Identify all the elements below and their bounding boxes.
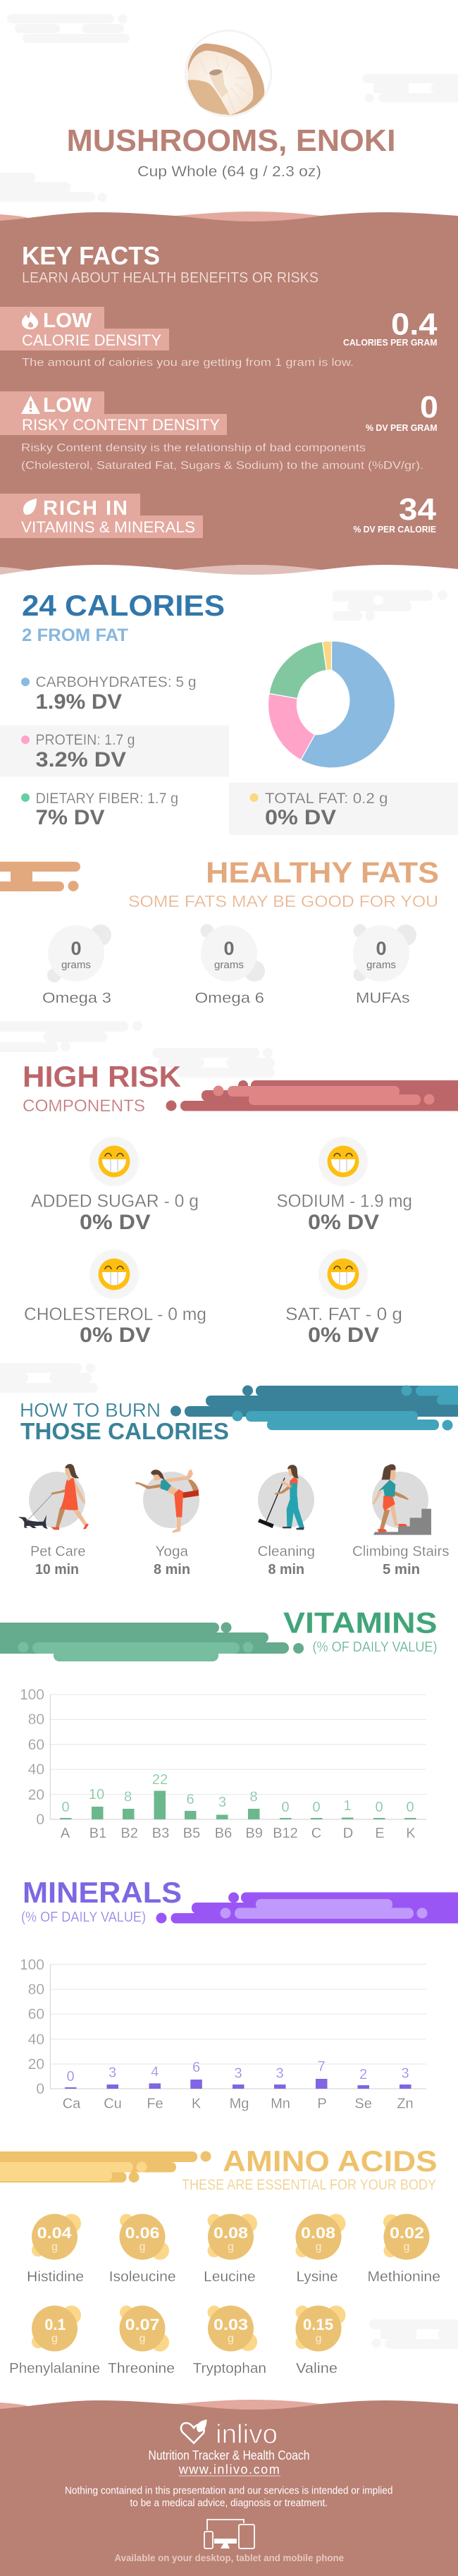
amino: phenylalanine: g [51, 2333, 58, 2345]
bar chart: vitamins: 10 [89, 1787, 104, 1802]
heading: how to burn: HOW TO BURN [20, 1399, 161, 1421]
bar chart: minerals: Fe [147, 2096, 163, 2111]
banner blob: teal [171, 1385, 458, 1430]
logo: inlivo: inlivo [216, 2420, 278, 2450]
amino: methionine: Methionine [367, 2269, 440, 2285]
bar chart: minerals: 6 [192, 2060, 200, 2075]
activity: climbing stairs: 5 min [383, 1562, 420, 1577]
banner blob: yellow [0, 2151, 211, 2183]
callout: calorie density [0, 307, 438, 369]
figure: woman sweeping [258, 1465, 304, 1530]
figure: woman in yoga pose [135, 1470, 199, 1533]
disclaimer: Nothing contained in this presentation and our services is intended or implied [65, 2485, 393, 2496]
amino: valine: Valine [296, 2361, 338, 2376]
bar chart: minerals: 3 [401, 2066, 409, 2082]
bar chart: vitamins: 100 [20, 1687, 44, 1703]
amino: phenylalanine: 0.1 [44, 2316, 66, 2333]
bar chart: minerals: 40 [28, 2032, 44, 2048]
bar chart: minerals [20, 1957, 426, 2111]
amino: isoleucine: g [140, 2241, 145, 2253]
item: added sugar: 0% DV [80, 1211, 151, 1234]
bar chart: minerals: 7 [317, 2059, 326, 2075]
fat: omega 6: Omega 6 [194, 990, 264, 1006]
heading: those calories: THOSE CALORIES [20, 1418, 229, 1444]
callout: risky content density [0, 390, 438, 472]
item: sodium: 0% DV [308, 1211, 379, 1234]
item: saturated fat: SAT. FAT - 0 g [285, 1305, 402, 1324]
heading: minerals: MINERALS [23, 1876, 182, 1909]
title: MUSHROOMS, ENOKI [66, 123, 396, 158]
bar chart: minerals: 4 [151, 2065, 159, 2080]
bar chart: vitamins: D [343, 1826, 353, 1841]
amino: isoleucine: 0.06 [125, 2224, 159, 2242]
callout: calorie density: CALORIES PER GRAM [343, 337, 437, 348]
item: sodium: SODIUM - 1.9 mg [276, 1192, 412, 1211]
callout: risky content density: RISKY CONTENT DENSITY [22, 416, 220, 434]
decorative clouds: high risk [0, 1021, 275, 1393]
subheading: from fat: 2 FROM FAT [22, 625, 128, 645]
fat: omega 6: 0 [223, 938, 235, 959]
banner blob: orange [0, 862, 80, 891]
icon: grin face [99, 1259, 130, 1290]
bar chart: vitamins: A [61, 1826, 70, 1841]
fat: omega 6 [194, 924, 265, 1006]
amino: leucine: g [228, 2241, 234, 2253]
banner blob: red [166, 1080, 458, 1111]
bar chart: minerals: 0 [66, 2069, 75, 2084]
macro: carbohydrates [21, 674, 196, 714]
fat: omega 3 [42, 924, 111, 1006]
bar chart: minerals: Ca [63, 2096, 81, 2111]
icon: warning triangle [21, 396, 40, 414]
bar chart: vitamins: E [375, 1826, 385, 1841]
amino: valine: g [316, 2333, 321, 2345]
bar chart: minerals: Se [354, 2096, 372, 2111]
callout: risky content density: Risky Content density is the relationship of bad components [21, 442, 366, 454]
panel: calories [0, 589, 458, 835]
icon: grin face [328, 1259, 359, 1290]
callout: calorie density: The amount of calories you are getting from 1 gram is low. [22, 357, 354, 369]
amino: leucine [204, 2214, 257, 2285]
activity: yoga: Yoga [155, 1544, 189, 1560]
amino: methionine [367, 2214, 440, 2285]
bar chart: minerals: Zn [397, 2096, 414, 2111]
heading: high risk: HIGH RISK [23, 1060, 181, 1093]
amino: isoleucine: Isoleucine [109, 2269, 176, 2285]
panel: how to burn calories [18, 1385, 458, 1577]
donut chart [268, 641, 395, 768]
disclaimer [65, 2485, 393, 2509]
decorative cloud: amino acids [369, 2319, 458, 2349]
macro: total fat [229, 783, 458, 835]
amino: phenylalanine [9, 2306, 100, 2376]
callout: rich in vitamins and minerals: % DV PER CALORIE [354, 524, 436, 535]
bar chart: minerals: 3 [109, 2065, 116, 2080]
macro: dietary fiber [21, 790, 178, 829]
bar chart: vitamins: 0 [36, 1812, 44, 1828]
bar chart: vitamins: B5 [183, 1826, 200, 1841]
amino: lysine: Lysine [297, 2269, 338, 2285]
bar chart: minerals: 80 [28, 1982, 44, 1998]
figure: woman walking dog [18, 1464, 89, 1530]
amino: histidine [27, 2214, 84, 2285]
icon: leaf [23, 499, 37, 515]
bar chart: vitamins: 6 [186, 1792, 194, 1807]
bar chart: minerals: 3 [234, 2066, 242, 2082]
amino: methionine: g [404, 2241, 409, 2253]
decorative cloud: calories [333, 590, 447, 621]
amino: histidine: 0.04 [37, 2224, 72, 2242]
item: added sugar [31, 1137, 199, 1234]
callout: risky content density: % DV PER GRAM [366, 422, 437, 433]
activity: climbing stairs [352, 1464, 450, 1577]
heading: amino acids: AMINO ACIDS [223, 2144, 437, 2178]
callout: risky content density: LOW [43, 394, 92, 417]
website link: www.inlivo.com [178, 2462, 280, 2477]
amino: lysine [296, 2214, 345, 2285]
panel: high risk components [23, 1060, 458, 1347]
amino: tryptophan: 0.03 [213, 2316, 248, 2333]
macro: total fat: 0% DV [265, 806, 336, 829]
heading: healthy fats: HEALTHY FATS [206, 856, 439, 889]
heading: calories: 24 CALORIES [22, 589, 225, 622]
activity: cleaning [258, 1465, 315, 1577]
tagline: Nutrition Tracker & Health Coach [148, 2448, 310, 2462]
fat: mufas: MUFAs [356, 990, 410, 1006]
item: cholesterol: CHOLESTEROL - 0 mg [24, 1305, 206, 1324]
activity: pet care: 10 min [35, 1562, 79, 1577]
bar chart: minerals: 20 [28, 2056, 44, 2073]
amino: lysine: g [316, 2241, 321, 2253]
bar chart: vitamins: 0 [406, 1800, 414, 1815]
activity: climbing stairs: Climbing Stairs [352, 1544, 450, 1560]
bar chart: minerals: Cu [104, 2096, 122, 2111]
callout: risky content density: 0 [420, 390, 438, 425]
bar chart: minerals: 100 [20, 1957, 44, 1973]
item: cholesterol: 0% DV [80, 1324, 151, 1347]
bar chart: vitamins: 0 [281, 1800, 290, 1815]
activity: yoga: 8 min [154, 1562, 190, 1577]
fat: mufas: grams [366, 959, 396, 971]
bar chart: vitamins: 60 [28, 1737, 44, 1753]
amino: histidine: g [51, 2241, 58, 2253]
activity: pet care: Pet Care [30, 1544, 86, 1560]
callout: rich in vitamins and minerals: VITAMINS & MINERALS [21, 518, 195, 536]
macro: protein: 3.2% DV [35, 748, 126, 771]
bar chart: vitamins: 40 [28, 1762, 44, 1778]
callout: rich in vitamins and minerals [0, 492, 437, 538]
fat: omega 6: grams [214, 959, 244, 971]
amino: lysine: 0.08 [301, 2224, 335, 2242]
callout: rich in vitamins and minerals: RICH IN [43, 497, 128, 520]
bar chart: minerals: 3 [276, 2066, 284, 2082]
macro: dietary fiber: 7% DV [35, 806, 104, 829]
bar chart: vitamins: C [311, 1826, 321, 1841]
item: sodium [276, 1137, 412, 1234]
bar chart: minerals: 0 [36, 2081, 44, 2097]
amino: leucine: 0.08 [213, 2224, 248, 2242]
icon: heart with leaf [181, 2419, 207, 2443]
panel: key facts [0, 212, 458, 575]
serving subtitle: Cup Whole (64 g / 2.3 oz) [137, 164, 321, 180]
icon: grin face [99, 1146, 130, 1177]
bar chart: vitamins: 1 [343, 1798, 352, 1814]
panel: amino acids [0, 2144, 440, 2376]
amino: valine: 0.15 [303, 2316, 333, 2333]
bar chart: minerals: P [317, 2096, 327, 2111]
figure: woman climbing stairs [372, 1464, 431, 1535]
callout: rich in vitamins and minerals: 34 [399, 492, 437, 527]
bar chart: minerals: Mg [230, 2096, 249, 2111]
macro: dietary fiber: DIETARY FIBER: 1.7 g [35, 790, 178, 807]
amino: threonine: g [140, 2333, 145, 2345]
macro: total fat: TOTAL FAT: 0.2 g [265, 790, 388, 807]
amino: threonine: Threonine [108, 2361, 175, 2376]
activity: yoga [135, 1470, 199, 1577]
callout: calorie density: LOW [43, 310, 92, 332]
fat: mufas: 0 [376, 938, 387, 959]
fat: mufas [353, 924, 416, 1006]
icon: devices [204, 2520, 254, 2548]
macro: carbohydrates: 1.9% DV [35, 690, 122, 714]
bar chart: minerals: Mn [271, 2096, 290, 2111]
activity: pet care [18, 1464, 89, 1577]
item: saturated fat [285, 1250, 402, 1347]
bar chart: vitamins: B12 [273, 1826, 298, 1841]
subheading: components: COMPONENTS [23, 1097, 145, 1116]
amino: valine [296, 2306, 345, 2376]
icon: grin face [328, 1146, 359, 1177]
icon: flame [22, 311, 38, 329]
bar chart: minerals: K [192, 2096, 202, 2111]
callout: risky content density: (Cholesterol, Saturated Fat, Sugars & Sodium) to the amount (%DV/gr). [21, 460, 423, 472]
amino: tryptophan: Tryptophan [193, 2361, 266, 2376]
heading: vitamins: VITAMINS [283, 1606, 437, 1639]
amino: phenylalanine: Phenylalanine [9, 2361, 100, 2376]
bar chart: vitamins: 80 [28, 1711, 44, 1728]
macro: protein: PROTEIN: 1.7 g [35, 732, 135, 748]
callout: calorie density: 0.4 [391, 307, 438, 341]
panel: vitamins [0, 1606, 437, 1841]
bar chart: vitamins: 0 [61, 1800, 70, 1815]
fat: omega 3: Omega 3 [42, 990, 111, 1006]
logo: inlivo [181, 2419, 278, 2450]
bar chart: vitamins: B3 [152, 1826, 169, 1841]
bar chart: vitamins: B6 [215, 1826, 232, 1841]
fat: omega 3: grams [61, 959, 91, 971]
heading: key facts: KEY FACTS [22, 241, 160, 270]
disclaimer: to be a medical advice, diagnosis or treatment. [130, 2498, 328, 2509]
bar chart: vitamins: 20 [28, 1787, 44, 1803]
amino: leucine: Leucine [204, 2269, 256, 2285]
amino: methionine: 0.02 [390, 2224, 424, 2242]
macro: protein [0, 725, 229, 777]
bar chart: vitamins: 8 [249, 1790, 258, 1805]
amino: tryptophan [193, 2306, 266, 2376]
bar chart: minerals: 60 [28, 2006, 44, 2022]
amino: threonine: 0.07 [125, 2316, 159, 2333]
bar chart: vitamins: B1 [89, 1826, 106, 1841]
amino: threonine [108, 2306, 175, 2376]
item: saturated fat: 0% DV [308, 1324, 379, 1347]
amino: tryptophan: g [228, 2333, 234, 2345]
bar chart: vitamins: K [406, 1826, 416, 1841]
macro: carbohydrates: CARBOHYDRATES: 5 g [35, 674, 196, 690]
bar chart: vitamins: B2 [120, 1826, 138, 1841]
item: added sugar: ADDED SUGAR - 0 g [31, 1192, 199, 1211]
activity: cleaning: Cleaning [258, 1544, 315, 1560]
subheading: daily value: (% OF DAILY VALUE) [21, 1910, 146, 1925]
bar chart: vitamins: B9 [245, 1826, 263, 1841]
callout: calorie density: CALORIE DENSITY [22, 331, 161, 349]
bar chart: vitamins: 8 [124, 1790, 132, 1805]
bar chart: vitamins: 22 [152, 1772, 168, 1788]
bar chart: vitamins [20, 1687, 426, 1841]
bar chart: vitamins: 0 [312, 1800, 321, 1815]
panel: healthy fats [0, 856, 439, 1006]
panel: footer [0, 2400, 458, 2576]
subheading: SOME FATS MAY BE GOOD FOR YOU [128, 892, 438, 910]
banner blob: green [0, 1622, 304, 1661]
amino: histidine: Histidine [27, 2269, 84, 2285]
amino: isoleucine [109, 2214, 176, 2285]
mushroom photo [185, 30, 271, 116]
subheading: LEARN ABOUT HEALTH BENEFITS OR RISKS [22, 269, 318, 286]
decorative clouds: header [0, 14, 458, 202]
fat: omega 3: 0 [70, 938, 82, 959]
subheading: daily value: (% OF DAILY VALUE) [313, 1640, 437, 1655]
panel: minerals [20, 1876, 458, 2111]
activity: cleaning: 8 min [268, 1562, 304, 1577]
bar chart: vitamins: 3 [218, 1795, 226, 1810]
item: cholesterol [24, 1250, 206, 1347]
bar chart: vitamins: 0 [375, 1800, 383, 1815]
availability note: Available on your desktop, tablet and mobile phone [114, 2552, 344, 2563]
bar chart: minerals: 2 [359, 2067, 367, 2082]
banner blob: purple [156, 1893, 458, 1924]
